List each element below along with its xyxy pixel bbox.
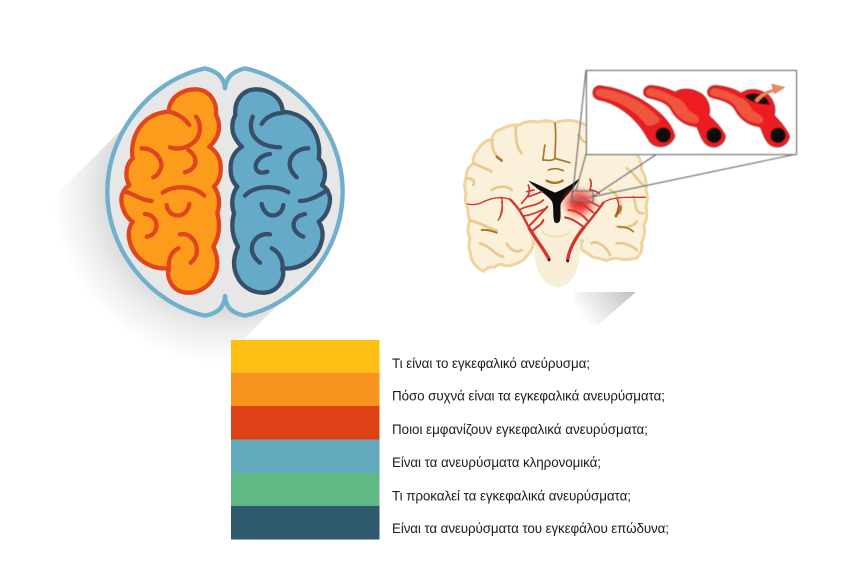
haemorrhage glow	[560, 185, 599, 220]
dark sulci	[482, 123, 633, 233]
colour block stack	[231, 340, 380, 540]
stage 3: ruptured vessel	[707, 84, 790, 147]
right hemisphere: blue	[231, 89, 330, 293]
zoom connector lines	[572, 70, 797, 202]
right artery	[565, 179, 645, 260]
left artery	[467, 185, 549, 259]
sulci folds	[467, 127, 643, 257]
aneurysm stages	[593, 84, 790, 147]
brain tissue	[465, 121, 647, 271]
stage 2: bulging vessel	[643, 85, 726, 147]
question list: Είναι τα ανευρύσματα κληρονομικά;	[392, 455, 601, 470]
icon: two-colour brain	[107, 68, 343, 316]
callout: magnified aneurysm inset	[572, 70, 797, 202]
icon: shadow under cross-section	[575, 292, 636, 325]
stage 1: healthy vessel	[593, 86, 675, 147]
vessel ends	[548, 259, 550, 261]
question list: Τι είναι το εγκεφαλικό ανεύρυσμα;	[392, 356, 590, 371]
inset frame	[586, 70, 796, 154]
question list: Τι προκαλεί τα εγκεφαλικά ανευρύσματα;	[392, 488, 631, 504]
question list	[392, 356, 669, 536]
left hemisphere: orange	[121, 89, 221, 293]
question list: Είναι τα ανευρύσματα του εγκεφάλου επώδυνα;	[392, 521, 669, 536]
question list: Πόσο συχνά είναι τα εγκεφαλικά ανευρύσματα;	[392, 388, 665, 404]
ventricle	[528, 178, 579, 223]
icon: long shadow of brain	[22, 109, 308, 395]
question list: Ποιοι εμφανίζουν εγκεφαλικά ανευρύσματα;	[392, 422, 648, 437]
illustration: brain cross-section with arteries	[465, 121, 647, 288]
brain stem	[534, 238, 580, 288]
rupture arrow	[754, 84, 785, 102]
head outline	[107, 68, 343, 316]
thalamus fold	[542, 232, 570, 237]
